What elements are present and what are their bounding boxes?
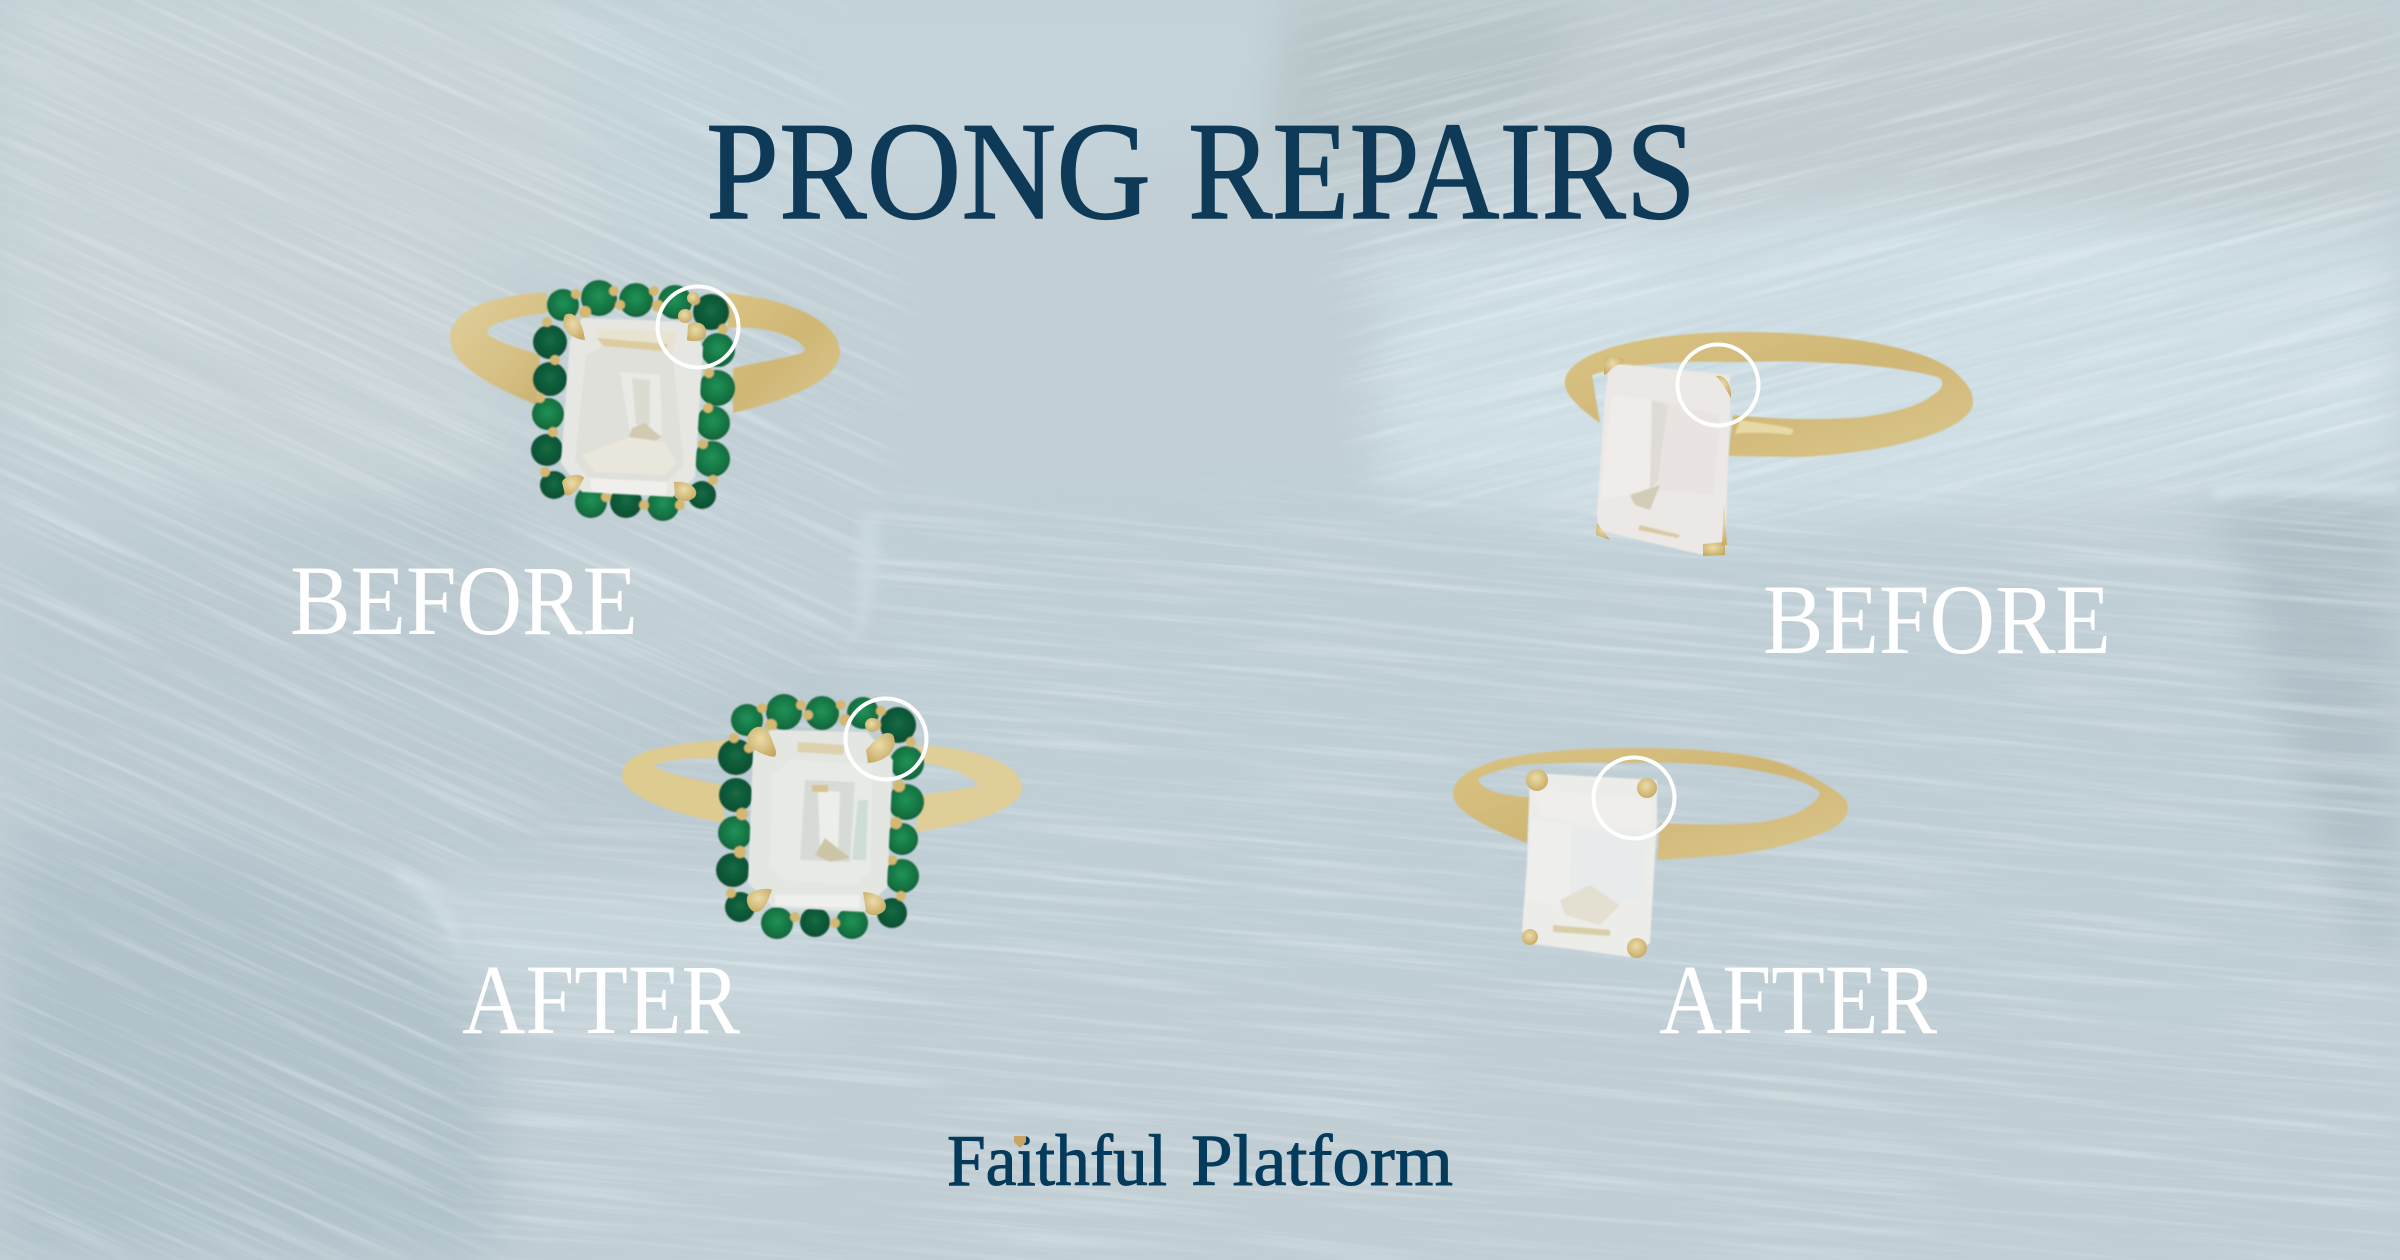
title [706, 94, 1696, 249]
label: after (left): AFTER [462, 944, 740, 1055]
ring band [450, 292, 840, 413]
ring band [622, 740, 1022, 832]
emerald-cut diamond [748, 730, 893, 912]
emerald halo [716, 694, 924, 939]
highlight circle [1678, 344, 1758, 426]
emerald-cut diamond [561, 318, 703, 497]
ring band [1453, 748, 1848, 860]
label: before (left): BEFORE [290, 545, 638, 656]
emerald-cut diamond [1522, 773, 1657, 957]
ring 4: solitaire, after [1453, 748, 1848, 958]
prongs [1522, 769, 1657, 958]
prongs [747, 718, 895, 915]
ring 1: emerald halo ring, before [450, 280, 840, 521]
emerald-cut diamond [1597, 363, 1730, 555]
prongs [562, 292, 706, 501]
ring band [1565, 332, 1973, 457]
highlight circle [846, 698, 926, 780]
label: after (right): AFTER [1659, 944, 1937, 1055]
title: REPAIRS [1188, 94, 1696, 249]
brand wordmark [947, 1120, 1453, 1201]
brand wordmark: Platform [1191, 1120, 1453, 1201]
highlight circle [1594, 758, 1674, 838]
highlight circle [658, 286, 738, 368]
brand wordmark: Faithful [947, 1120, 1167, 1201]
prongs [1596, 356, 1731, 556]
emerald halo [531, 280, 735, 521]
ring 3: emerald halo ring, after [622, 694, 1022, 939]
label: before (right): BEFORE [1763, 564, 2111, 675]
ring 2: solitaire, before [1565, 332, 1973, 556]
icon: gold diamond dot [1014, 1136, 1026, 1148]
title: PRONG [706, 94, 1151, 249]
